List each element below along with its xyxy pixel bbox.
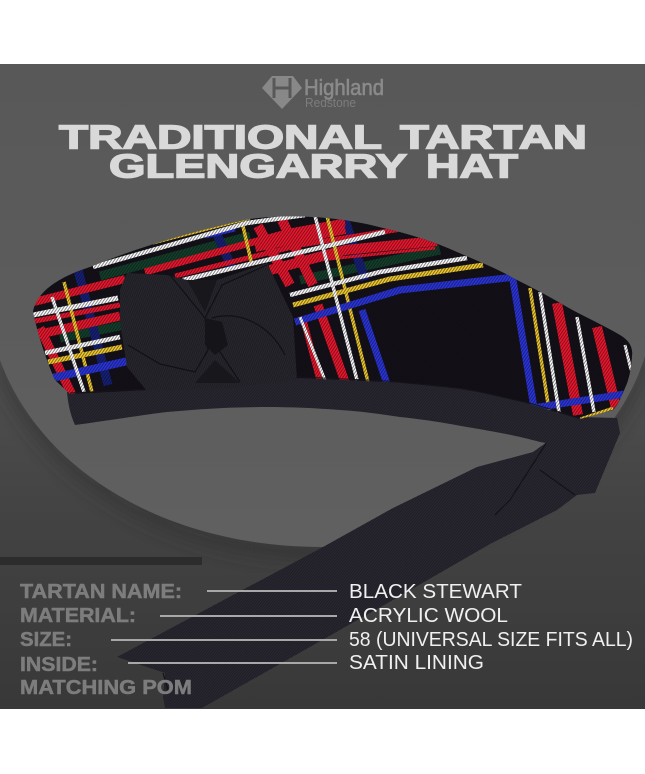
hat band top shadow [70,377,580,418]
tartan crown [33,216,632,419]
twill texture [33,216,632,419]
spec: matching pom: MATCHING POM [20,677,192,699]
tartan green stripes [60,236,440,338]
spec: material [20,604,508,627]
spec: size: SIZE: [20,629,72,651]
title word: tartan: TARTAN [400,118,587,156]
logo subtitle: Redstone [305,95,356,110]
background disc [0,64,645,547]
spec: inside [20,651,484,676]
disc shadow [0,356,645,553]
title [59,118,587,184]
tartan blue stripes [52,229,625,408]
spec: tartan name: BLACK STEWART [349,580,522,603]
title word: glengarry: GLENGARRY [109,148,407,184]
icon: diamond logo mark [262,76,302,109]
bow [120,263,297,391]
logo [262,75,384,110]
tartan dark blue stripes [78,220,365,385]
spec: inside: INSIDE: [20,654,98,676]
spec: material: MATERIAL: [20,605,136,627]
spec: inside: SATIN LINING [349,651,484,674]
logo wordmark: Highland [304,75,384,100]
title word: hat: HAT [426,148,518,184]
accent bar [0,557,202,565]
spec: tartan name: TARTAN NAME: [20,581,182,603]
tartan white stripes [33,215,631,412]
spec: size [20,628,633,651]
ribbon tail [117,418,620,708]
spec: size: 58 (UNIVERSAL SIZE FITS ALL) [349,628,633,651]
tartan red stripes [30,220,616,415]
spec: tartan name [20,580,522,603]
hat illustration [20,200,645,708]
tartan yellow stripes [48,216,613,419]
hat band [67,376,620,452]
title word: traditional: TRADITIONAL [59,118,382,156]
spec list [20,580,633,699]
spec: material: ACRYLIC WOOL [349,604,508,627]
